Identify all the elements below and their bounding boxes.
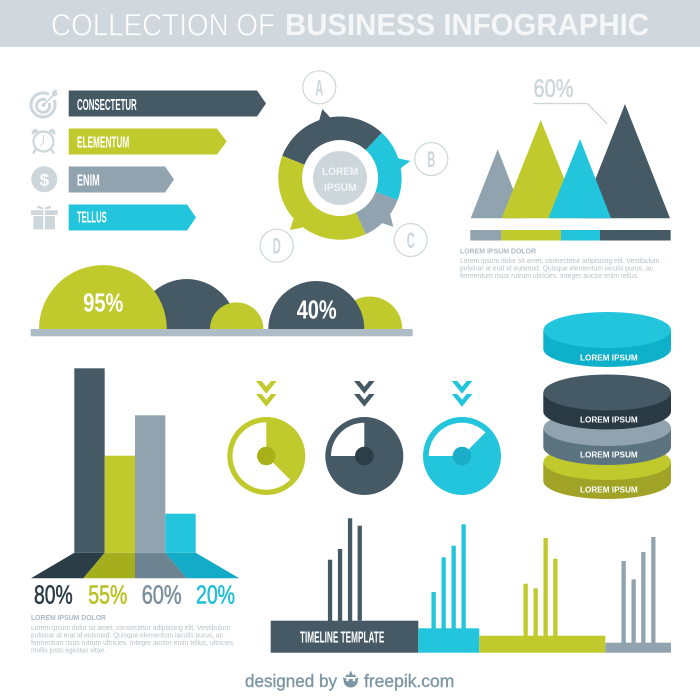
text block: mountain chart: fermentum risus rutrum ultricies. Integer auctor enim tellus. bbox=[460, 271, 639, 280]
title banner bbox=[0, 0, 700, 47]
ribbon: enim: ENIM bbox=[77, 172, 100, 189]
icon: gift box bbox=[31, 206, 58, 229]
semicircle dark 40%: 40% bbox=[297, 294, 337, 324]
semicircle dark 40% bbox=[268, 281, 364, 329]
callout A: A bbox=[315, 76, 323, 100]
gauge dark bbox=[325, 417, 403, 495]
semicircle dark bbox=[137, 279, 237, 329]
text block: bar chart bbox=[31, 613, 233, 654]
callout C bbox=[394, 224, 427, 256]
disc dark: LOREM IPSUM bbox=[580, 415, 638, 425]
callout A bbox=[303, 71, 336, 104]
gauge cyan bbox=[423, 417, 501, 495]
text block: bar chart: fermentum risus rutrum ultricies. Integer auctor enim tellus, ultricies bbox=[31, 638, 233, 647]
text block: bar chart: mollis justo egestas vitae. bbox=[31, 646, 106, 654]
callout C: C bbox=[407, 228, 415, 253]
text block: mountain chart bbox=[460, 246, 660, 280]
bar green 55% bbox=[105, 456, 135, 553]
triangle dark bbox=[580, 104, 670, 218]
donut centre: LOREM bbox=[322, 166, 358, 178]
text block: bar chart: LOREM IPSUM DOLOR bbox=[31, 613, 106, 622]
semicircle green 95% bbox=[39, 265, 167, 329]
ribbon: tellus: TELLUS bbox=[77, 210, 107, 227]
chevrons green bbox=[256, 381, 277, 407]
callout D: D bbox=[273, 234, 281, 259]
credit: designed by: designed by bbox=[245, 671, 337, 691]
cylinder stack bbox=[543, 312, 671, 499]
ribbon: enim bbox=[69, 166, 174, 192]
callout B: B bbox=[427, 147, 435, 172]
donut segment: dark bbox=[282, 109, 382, 165]
text block: bar chart: Lorem ipsum dolor sit amet, consectetur adipiscing elit. Vestibulum bbox=[31, 623, 230, 632]
credit: freepik.com: freepik.com bbox=[364, 671, 454, 691]
timeline bbox=[271, 518, 671, 653]
donut segment: cyan bbox=[366, 133, 410, 200]
triangle green bbox=[502, 120, 580, 218]
chevrons dark bbox=[354, 381, 375, 407]
timeline segment dark: TIMELINE TEMPLATE bbox=[300, 629, 384, 646]
timeline segment dark bbox=[271, 518, 418, 653]
donut centre bbox=[313, 151, 367, 205]
donut segment: green bbox=[278, 156, 366, 240]
text block: mountain chart: LOREM IPSUM DOLOR bbox=[460, 246, 536, 255]
text block: bar chart: pulvinar at erat id euismod. Quisque elementum iaculis purus, ac bbox=[31, 630, 223, 640]
disc cyan bbox=[543, 312, 671, 367]
semicircle green right bbox=[337, 296, 402, 329]
icon: freepik logo bbox=[343, 670, 358, 688]
mountain legend strip bbox=[470, 230, 671, 240]
disc cyan: LOREM IPSUM bbox=[580, 352, 638, 362]
mountain chart bbox=[471, 104, 670, 218]
bar cyan 20% bbox=[165, 514, 196, 553]
icon: dollar coin bbox=[31, 166, 57, 192]
bar grey 60% bbox=[135, 415, 165, 553]
60% callout: 60% bbox=[534, 75, 574, 103]
disc grey bbox=[543, 410, 671, 465]
disc green bbox=[543, 444, 671, 499]
bar label 60%: 60% bbox=[142, 579, 182, 609]
icon: dollar coin: $ bbox=[40, 170, 50, 189]
title banner: BUSINESS INFOGRAPHIC bbox=[285, 7, 649, 42]
bar chart bbox=[31, 368, 239, 578]
donut chart bbox=[278, 109, 410, 240]
triangle grey bbox=[471, 149, 524, 218]
bar label 80%: 80% bbox=[34, 579, 73, 609]
ribbon: consectetur bbox=[69, 90, 266, 116]
icon: alarm clock bbox=[32, 128, 55, 154]
chevrons cyan bbox=[452, 381, 472, 407]
timeline segment cyan bbox=[418, 524, 479, 653]
gauge green bbox=[227, 417, 305, 495]
60% callout bbox=[533, 75, 607, 124]
ribbon: consectetur: CONSECTETUR bbox=[77, 97, 137, 114]
text block: mountain chart: pulvinar at erat id euismod. Quisque elementum iaculis purus, ac bbox=[460, 264, 653, 272]
triangle cyan bbox=[548, 139, 611, 218]
donut segment: grey bbox=[356, 192, 398, 234]
callout D bbox=[260, 229, 293, 262]
ribbon: elementum: ELEMENTUM bbox=[77, 135, 129, 152]
bar dark 80% bbox=[74, 368, 105, 553]
timeline segment grey bbox=[605, 537, 671, 653]
bar bases bbox=[31, 553, 239, 578]
disc dark bbox=[543, 374, 671, 430]
title banner: COLLECTION OF bbox=[51, 6, 275, 42]
semicircle green small bbox=[210, 302, 263, 329]
bar label 55%: 55% bbox=[88, 579, 127, 609]
text block: mountain chart: Lorem ipsum dolor sit amet, consectetur adipiscing elit. Vestibulum bbox=[460, 256, 660, 265]
disc green: LOREM IPSUM bbox=[580, 485, 638, 495]
callout B bbox=[415, 142, 448, 176]
semicircle chart bbox=[31, 265, 413, 336]
donut centre: IPSUM bbox=[324, 182, 357, 194]
disc grey: LOREM IPSUM bbox=[580, 450, 638, 460]
icon: target bbox=[31, 90, 58, 117]
semicircle green 95%: 95% bbox=[83, 288, 123, 318]
ribbon: elementum bbox=[69, 128, 227, 154]
ribbon: tellus bbox=[69, 204, 196, 230]
base bar bbox=[31, 329, 413, 336]
bar label 20%: 20% bbox=[196, 579, 235, 609]
timeline segment green bbox=[479, 538, 605, 653]
